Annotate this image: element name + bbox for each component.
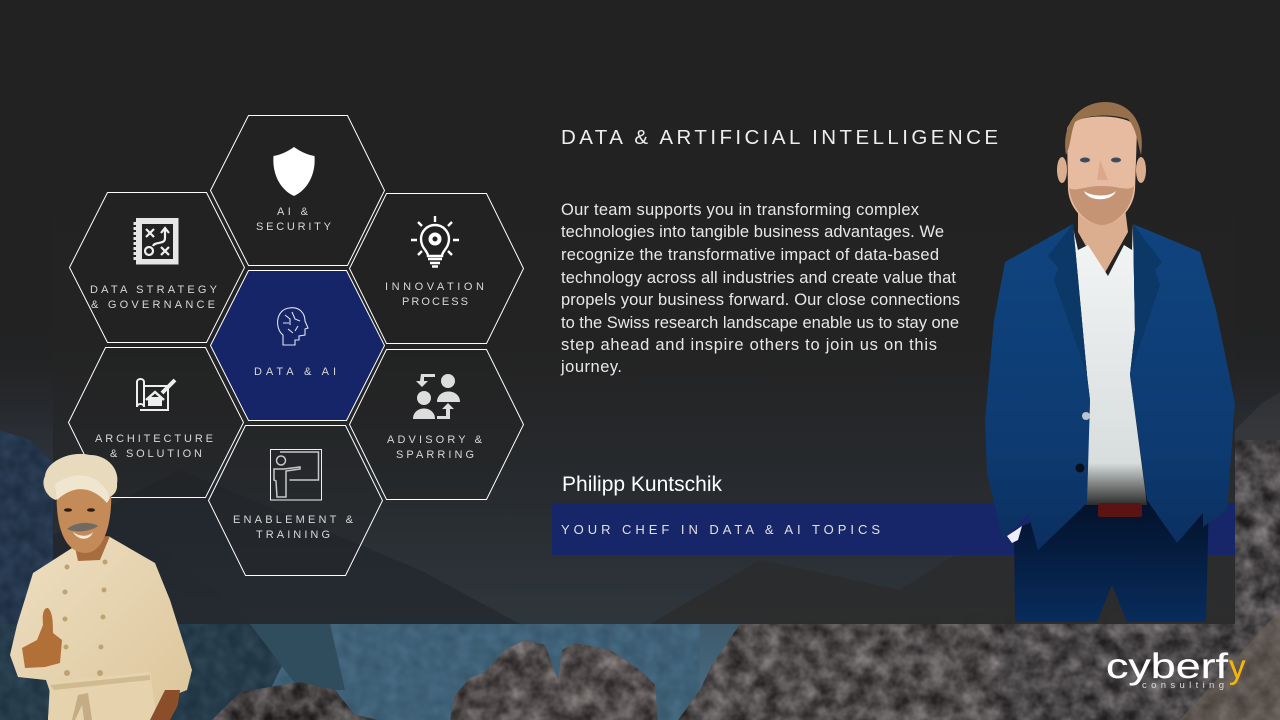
body text: propels your business forward. Our close connections: [561, 291, 960, 309]
trousers: [1014, 490, 1209, 622]
hexagon: Data & AI (highlighted): [210, 270, 384, 420]
icon: light bulb: [411, 216, 459, 266]
logo: cyberfy consulting: [1106, 647, 1246, 691]
label: AI & Security: AI &: [277, 206, 309, 218]
hexagon: AI & Security: [210, 116, 384, 266]
icon: advisory people: [413, 374, 460, 419]
name: Philipp Kuntschik: [562, 473, 722, 496]
jacket: [985, 224, 1235, 550]
body text: technologies into tangible business advantages. We: [561, 223, 944, 241]
neck: [1078, 200, 1128, 276]
body text: Our team supports you in transforming complex: [561, 201, 920, 219]
label: Data Strategy & Governance: [90, 284, 218, 311]
icon: trainer at board: [270, 450, 322, 500]
icon: blueprint house: [137, 379, 175, 410]
icon: shield: [273, 147, 315, 196]
label: Architecture & Solution: [95, 433, 213, 460]
hexagon diagram: [68, 116, 524, 576]
hand thumbs-up: [22, 608, 62, 668]
hexagon: Architecture & Solution: [68, 348, 244, 498]
label: Enablement & Training: ENABLEMENT &: [233, 514, 354, 526]
icon: strategy board: [135, 218, 178, 264]
coat: [10, 537, 192, 720]
cuffs: [1007, 526, 1022, 543]
logo: cyberfy consulting: consulting: [1142, 680, 1224, 691]
forearm: [150, 690, 180, 720]
chef hat: [43, 454, 117, 500]
body text: step ahead and inspire others to join us on this: [561, 336, 937, 354]
role banner: [552, 503, 1235, 555]
label: Data & AI: DATA & AI: [254, 366, 336, 378]
hexagon: Innovation Process: [350, 194, 524, 344]
label: AI & Security: [256, 206, 332, 233]
icon: AI head: [278, 308, 308, 345]
label: Advisory & Sparring: ADVISORY &: [387, 434, 483, 446]
hexagon: Data Strategy & Governance: [70, 192, 244, 342]
label: Innovation Process: PROCESS: [402, 296, 468, 308]
head: [1057, 102, 1146, 225]
label: Architecture & Solution: & SOLUTION: [110, 448, 202, 460]
label: Enablement & Training: [233, 514, 354, 541]
body text: technology across all industries and create value that: [561, 269, 956, 287]
hexagon: Enablement & Training: [208, 426, 382, 576]
logo: cyberfy consulting: cyberf: [1106, 647, 1228, 686]
label: Innovation Process: INNOVATION: [385, 281, 484, 293]
portrait: Philipp Kuntschik: [985, 102, 1235, 622]
label: Architecture & Solution: ARCHITECTURE: [95, 433, 213, 445]
label: Advisory & Sparring: [387, 434, 483, 461]
apron: [48, 672, 157, 720]
illustration: chef: [10, 454, 192, 720]
shirt: [1073, 224, 1147, 505]
label: Innovation Process: [385, 281, 484, 308]
belt: [1098, 503, 1142, 517]
face: [57, 487, 111, 553]
label: Advisory & Sparring: SPARRING: [396, 449, 474, 461]
body text: recognize the transformative impact of data-based: [561, 246, 939, 264]
lapels: [1048, 224, 1162, 375]
heading: DATA & ARTIFICIAL INTELLIGENCE: [561, 126, 998, 149]
label: Data Strategy & Governance: & GOVERNANCE: [91, 299, 215, 311]
hexagon: Advisory & Sparring: [350, 350, 524, 500]
logo: cyberfy consulting: y: [1229, 648, 1246, 685]
neck: [73, 536, 110, 561]
jacket buttons: [1076, 412, 1090, 472]
body text: [560, 201, 960, 376]
role banner: YOUR CHEF IN DATA & AI TOPICS: [561, 522, 880, 537]
body text: to the Swiss research landscape enable us to stay one: [561, 314, 959, 332]
body text: journey.: [560, 358, 622, 376]
label: AI & Security: SECURITY: [256, 221, 332, 233]
label: Enablement & Training: TRAINING: [256, 529, 330, 541]
buttons: [62, 560, 108, 676]
label: Data Strategy & Governance: DATA STRATEGY: [90, 284, 218, 296]
